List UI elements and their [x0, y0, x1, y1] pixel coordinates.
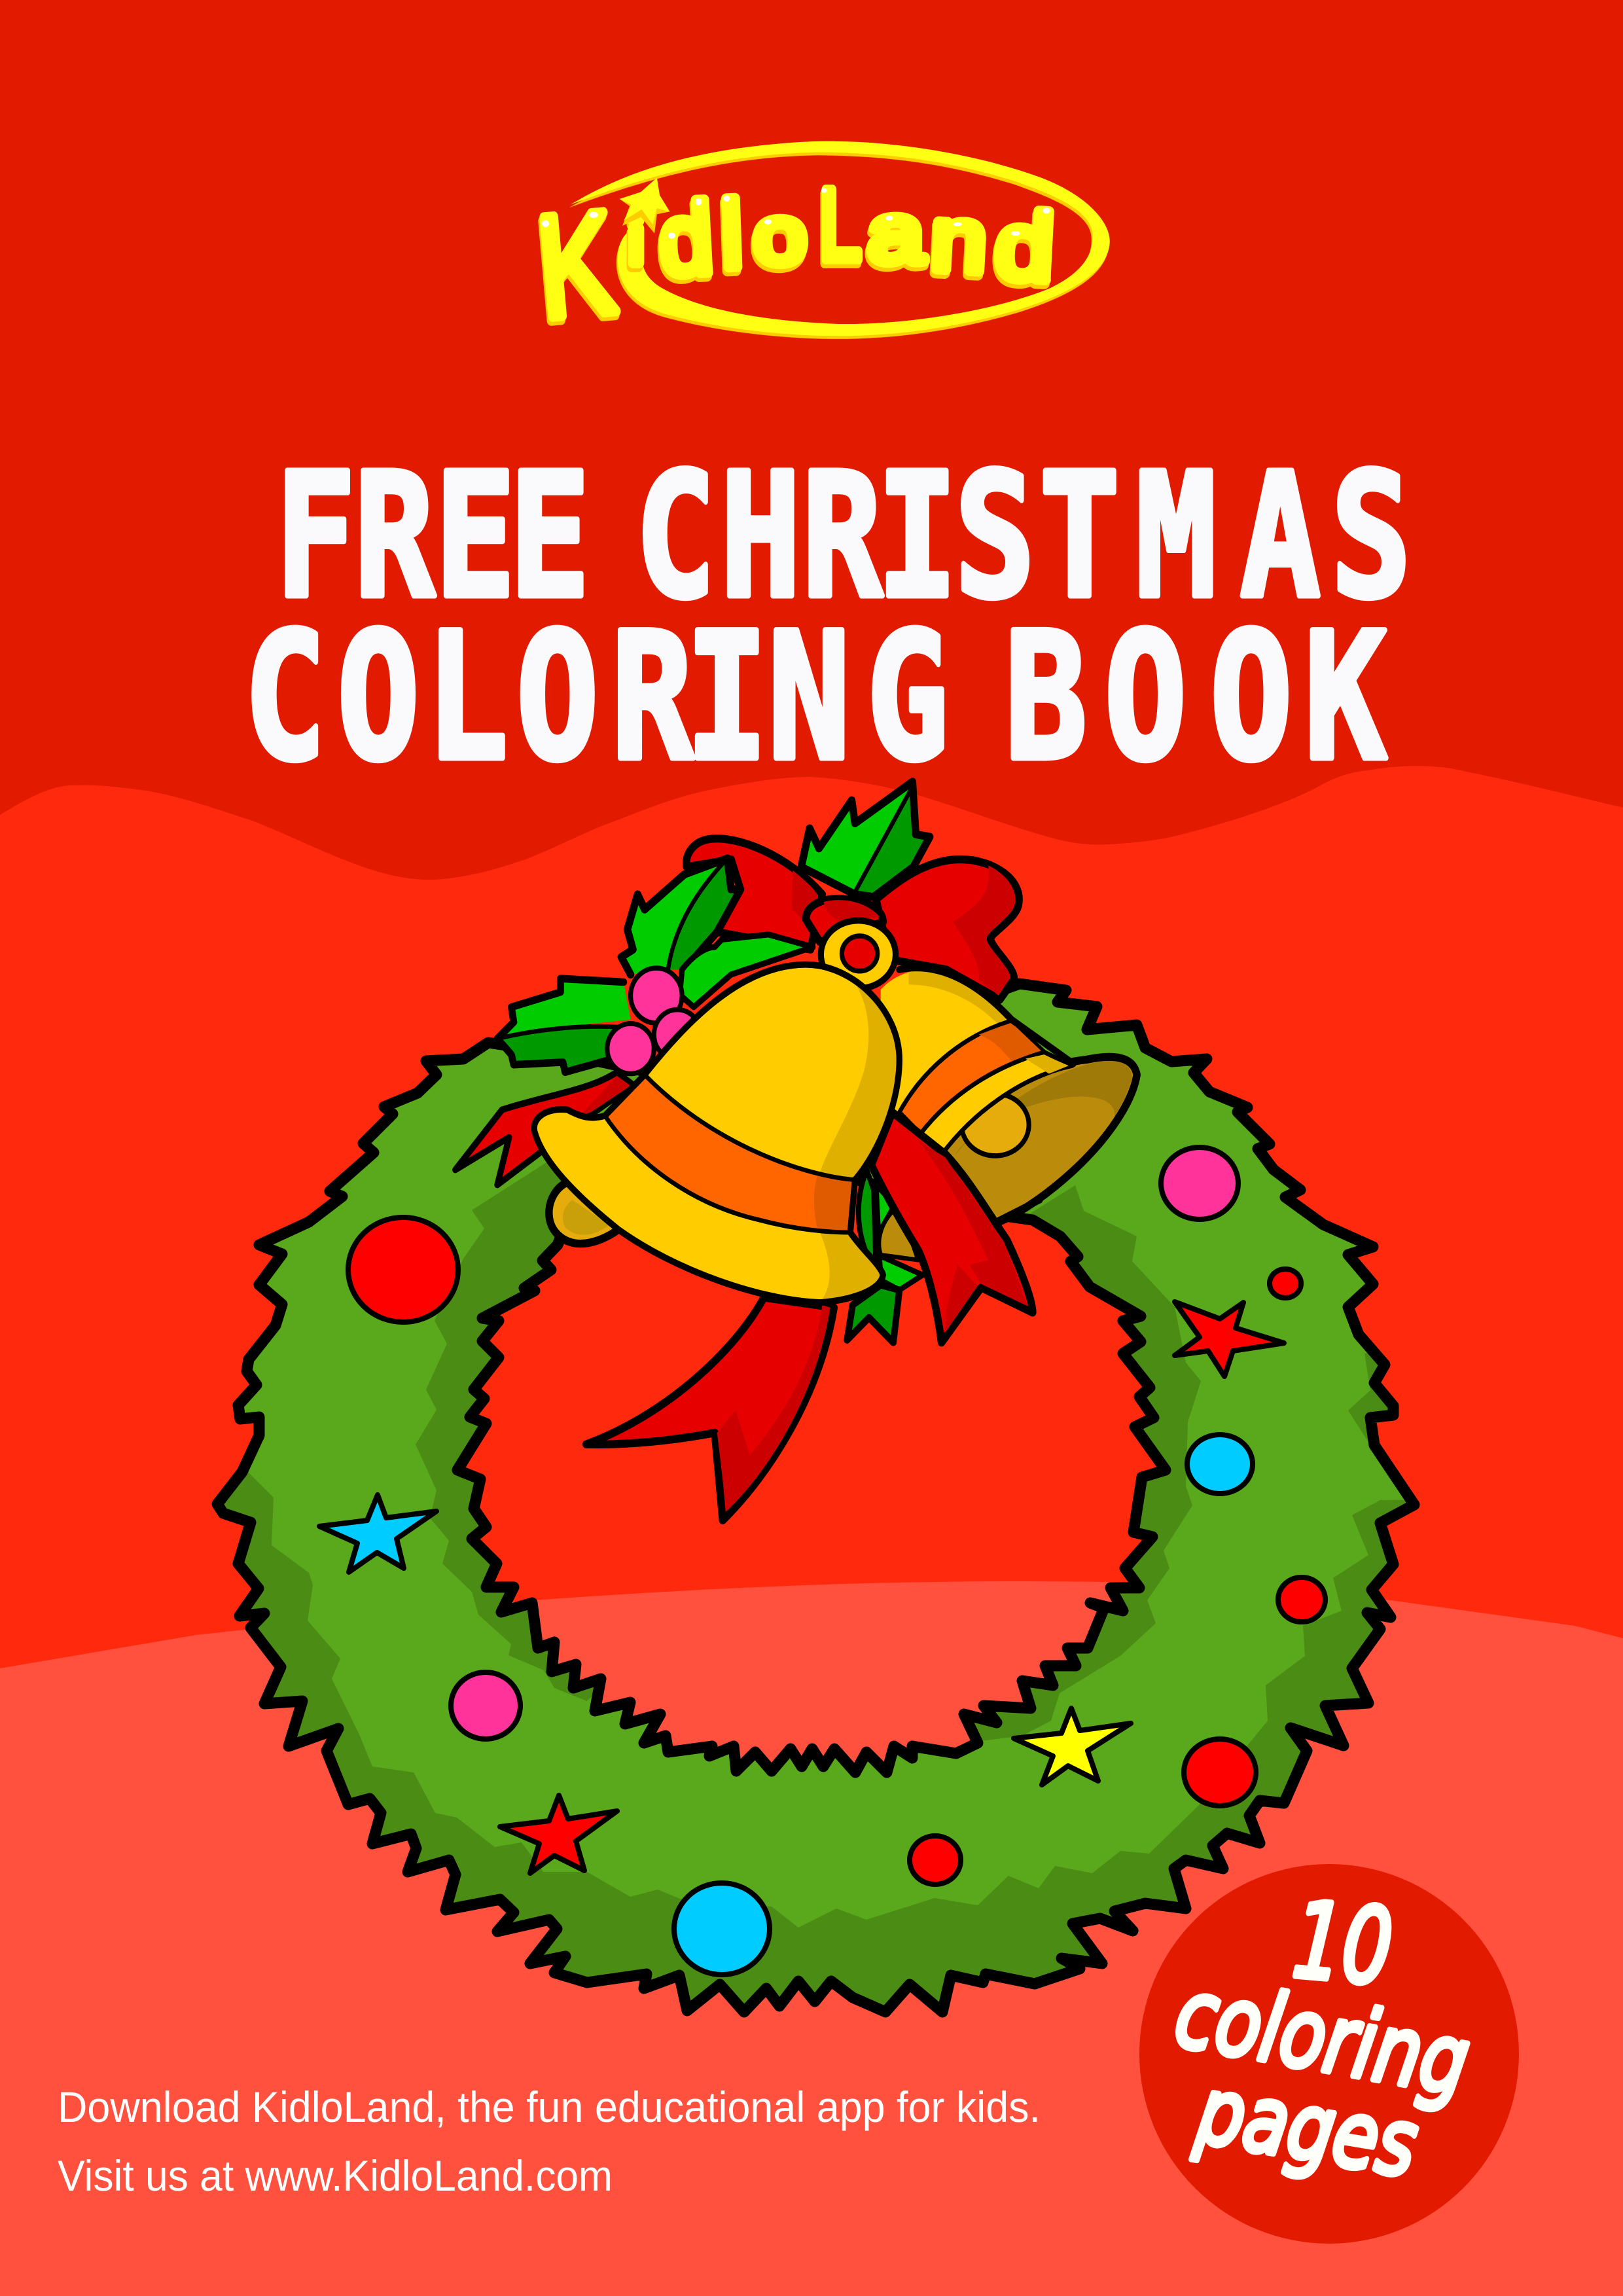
background: light red foreground hill: [0, 1581, 1623, 2296]
berries: [607, 968, 701, 1073]
badge text: coloring: [1168, 1958, 1477, 2118]
bell: hanging ring: [821, 920, 896, 988]
badge text: pages: [1190, 2057, 1424, 2198]
title line 1: FREE CHRISTMAS: [276, 437, 1412, 636]
footer text: [58, 2083, 1041, 2200]
footer line 1: Download KidloLand, the fun educational app for kids.: [58, 2083, 1041, 2131]
ribbon: long lower tail: [586, 1297, 834, 1520]
background: middle red wave: [0, 766, 1623, 2296]
logo: letters: l: [719, 181, 744, 288]
wreath: green ring fill and shading: [224, 990, 1406, 2005]
ribbon: right tail over bells: [871, 1112, 1033, 1342]
title line 2: COLORING BOOK: [243, 595, 1387, 800]
bell: back clapper: [961, 1094, 1029, 1156]
holly: top leaf: [801, 781, 930, 897]
bow: left loop: [687, 838, 822, 950]
wreath: [212, 978, 1420, 2017]
logo: letters: d: [993, 192, 1056, 301]
bells, bow and holly: [455, 781, 1137, 1520]
bow: right loop: [876, 859, 1019, 999]
holly: left leaf: [621, 858, 740, 975]
logo: letters: i: [629, 204, 643, 278]
logo: letters: n: [929, 187, 990, 291]
logo: letters: o: [754, 189, 806, 281]
bell: front bell: [534, 965, 899, 1302]
holly: low left leaf: [497, 978, 631, 1072]
badge text: 10: [1289, 1878, 1397, 2009]
wreath: ball and star ornaments: [319, 1147, 1325, 1975]
logo: letters: [531, 168, 1056, 348]
wreath: jagged black outline: [217, 984, 1414, 2012]
ribbon: left tail: [455, 1072, 633, 1185]
bow: knot: [806, 899, 883, 942]
logo: swoosh ellipse and star: [570, 141, 1110, 336]
badge: 10 coloring pages: [1139, 1864, 1519, 2244]
logo: letters: K: [531, 181, 620, 348]
badge circle: [1139, 1864, 1519, 2244]
holly: under the bells: [847, 1170, 923, 1342]
footer line 2: Visit us at www.KidloLand.com: [58, 2151, 613, 2200]
title: [243, 437, 1412, 800]
logo: letters: L: [819, 168, 861, 281]
bell: front clapper: [549, 1183, 621, 1244]
logo: KidloLand: [531, 141, 1110, 348]
logo: star and highlights: [542, 178, 1050, 239]
holly: centre leaf: [680, 935, 813, 1007]
logo: letters: a: [868, 187, 924, 279]
badge text: [1168, 1878, 1477, 2198]
logo: letters: d: [656, 181, 715, 296]
bell: back bell: [881, 968, 1137, 1223]
